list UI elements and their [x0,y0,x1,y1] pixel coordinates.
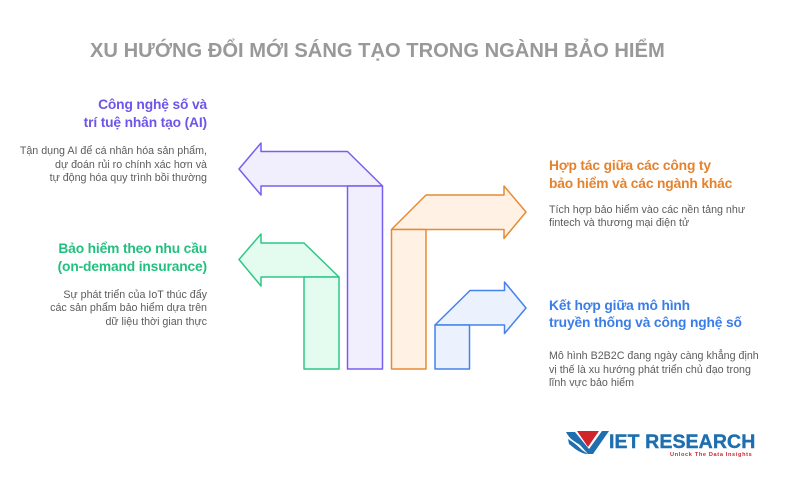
text: digital technology and AI: tự động hóa quy trình bồi thường [50,172,207,184]
text: on-demand insurance [50,288,207,328]
heading: traditional and digital hybrid: truyền thống và công nghệ số [549,315,742,330]
arrow: blue [435,282,526,369]
heading: digital technology and AI: trí tuệ nhân tạo (AI) [84,114,207,130]
heading: digital technology and AI: Công nghệ số và [98,97,207,112]
text: cross-industry cooperation: Tích hợp bảo hiểm vào các nền tảng như [549,204,745,216]
heading: on-demand insurance: (on-demand insurance) [58,258,207,274]
text: on-demand insurance: các sản phẩm bảo hiểm dựa trên [50,302,207,314]
heading: on-demand insurance [58,241,207,274]
text: digital technology and AI [20,145,207,184]
logo: Viet Research [566,431,755,458]
text: traditional and digital hybrid: Mô hình B2B2C đang ngày càng khẳng định [549,350,759,362]
heading: cross-industry cooperation: bảo hiểm và các ngành khác [549,176,732,190]
text: traditional and digital hybrid: lĩnh vực bảo hiểm [549,377,634,389]
heading: cross-industry cooperation [549,158,732,191]
logo wordmark: IET RESEARCH [609,431,755,453]
text: traditional and digital hybrid: vị thế là xu hướng phát triển chủ đạo trong [549,364,751,376]
heading: on-demand insurance: Bảo hiểm theo nhu cầu [58,241,207,256]
text: on-demand insurance: dữ liệu thời gian thực [105,316,207,328]
arrow: purple [239,143,382,369]
heading: cross-industry cooperation: Hợp tác giữa các công ty [549,158,711,173]
arrow: orange [392,186,526,369]
text: on-demand insurance: Sự phát triển của IoT thúc đẩy [63,288,207,300]
arrow: green [239,234,339,369]
logo mark [566,431,609,454]
text: digital technology and AI: Tận dụng AI để cá nhân hóa sản phẩm, [20,145,207,157]
heading: digital technology and AI [84,97,208,130]
heading: traditional and digital hybrid: Kết hợp giữa mô hình [549,298,690,312]
logo tagline: Unlock The Data Insights [670,452,752,458]
text: traditional and digital hybrid [549,349,759,389]
text: cross-industry cooperation: fintech và thương mại điện tử [549,217,689,229]
text: cross-industry cooperation [549,204,745,229]
text: digital technology and AI: dự đoán rủi ro chính xác hơn và [55,158,207,170]
title: XU HƯỚNG ĐỔI MỚI SÁNG TẠO TRONG NGÀNH BẢO HIỂM [90,40,665,62]
heading: traditional and digital hybrid [549,298,742,330]
